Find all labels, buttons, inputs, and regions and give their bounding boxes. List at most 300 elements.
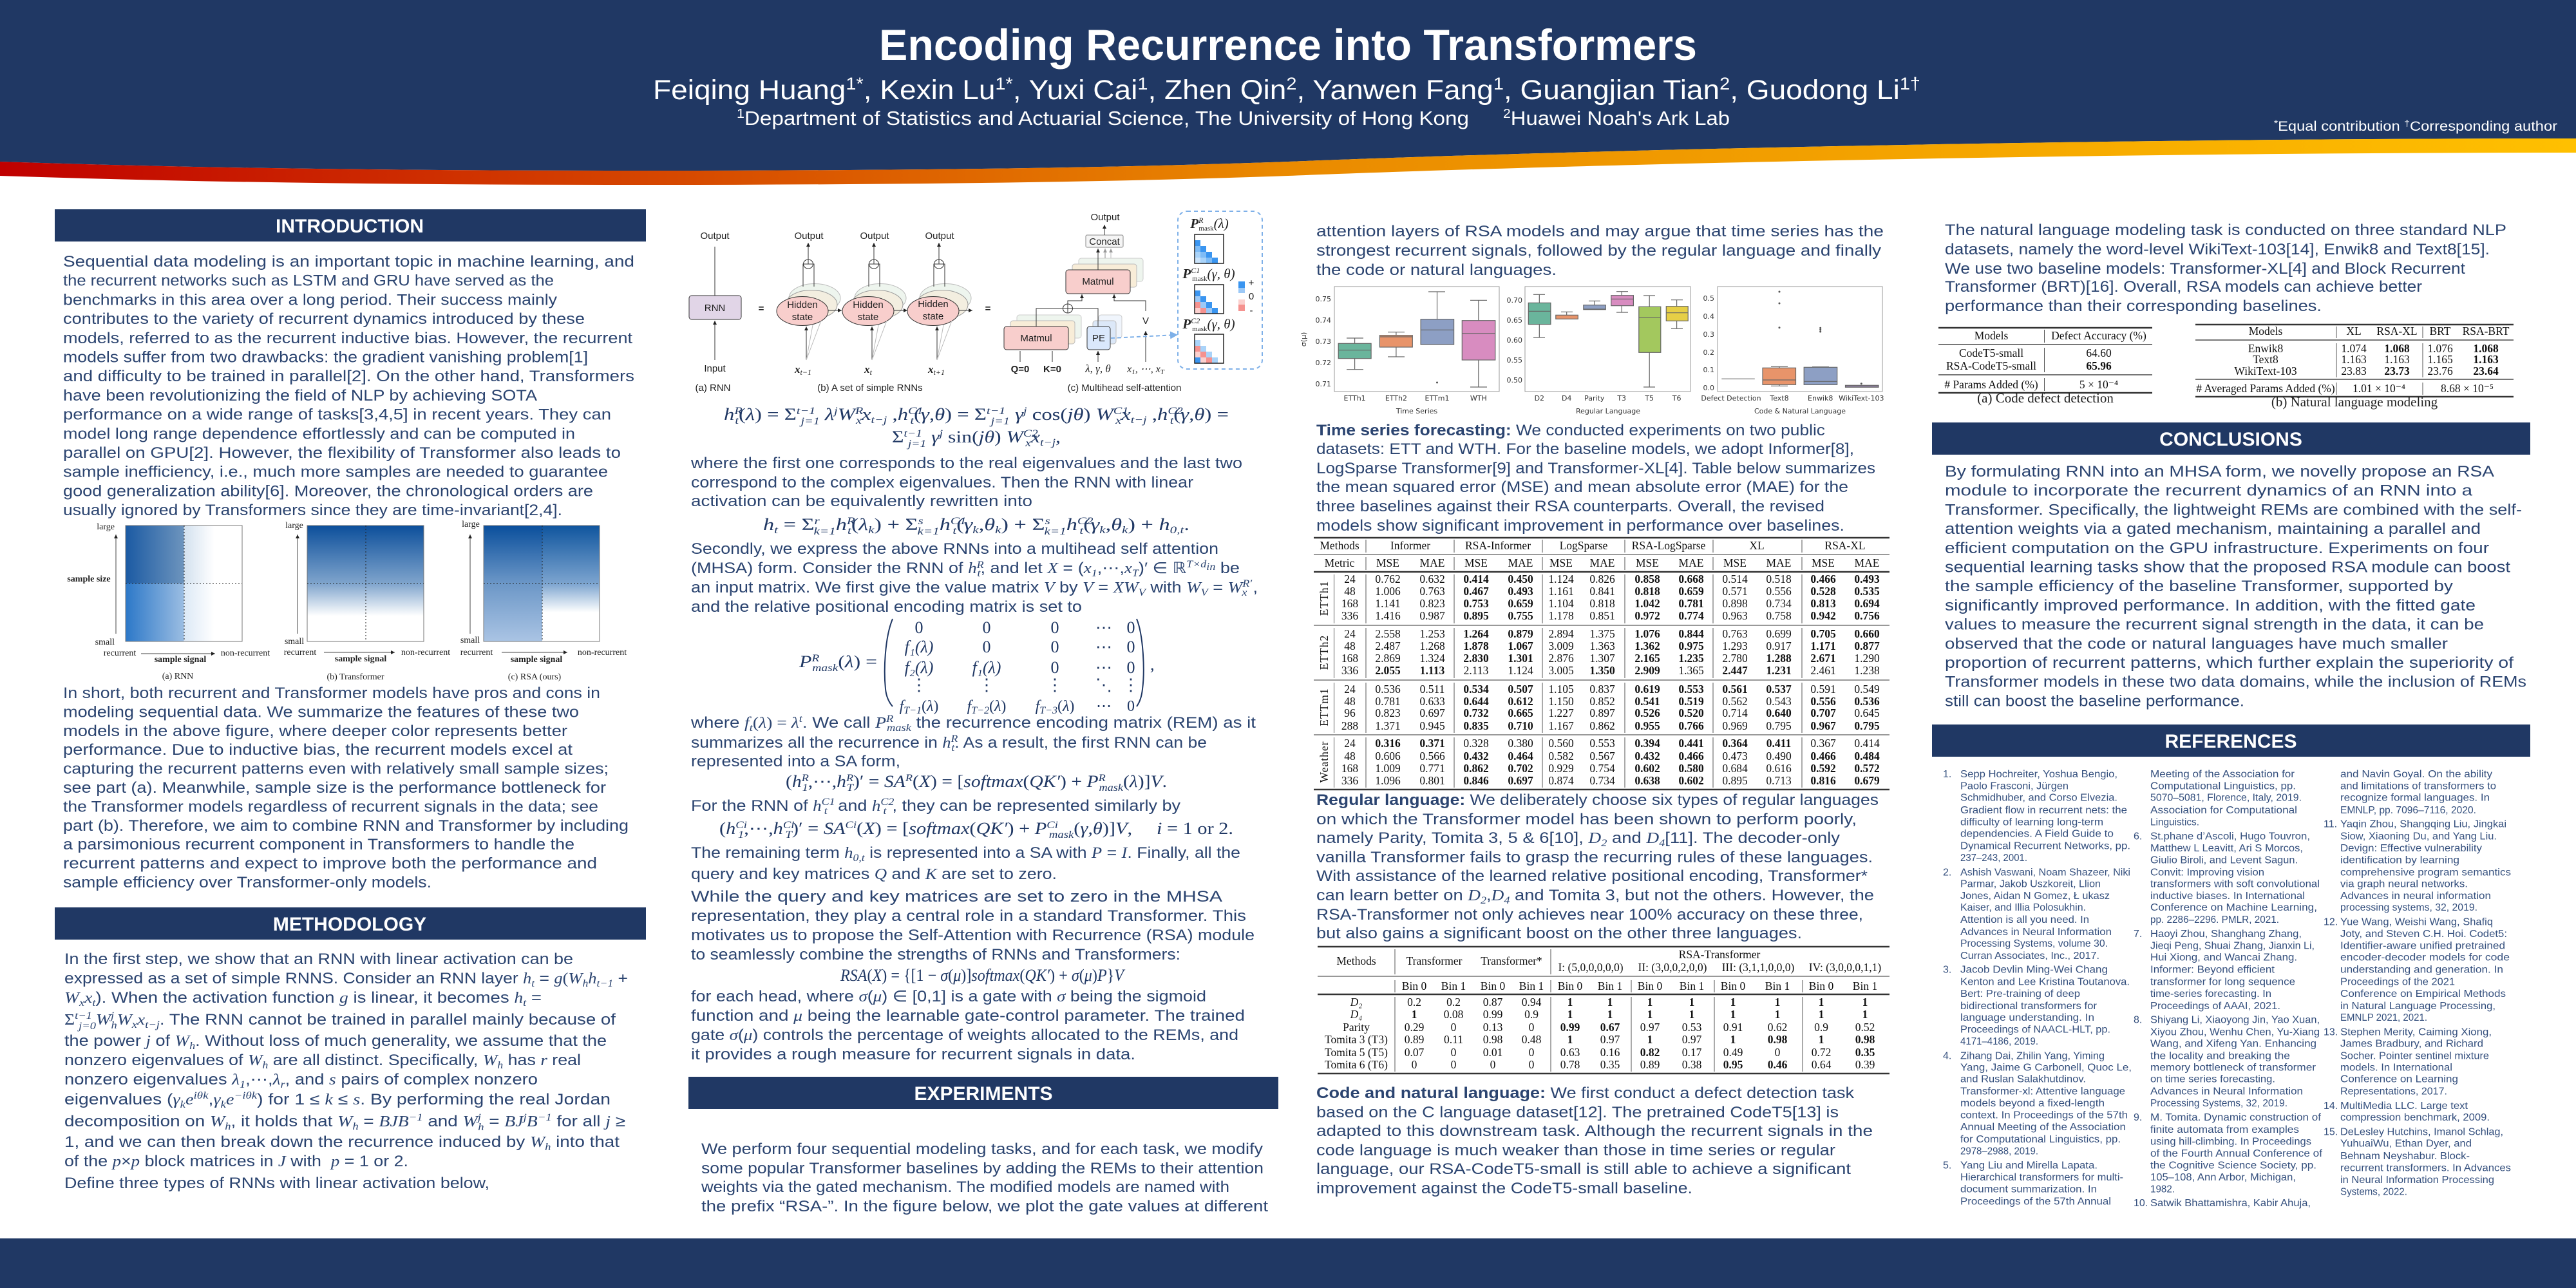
text: references column 2: pp. 2286–2296. PMLR, 2021.	[2150, 914, 2279, 925]
table: regular language results: 1	[1412, 1008, 1417, 1021]
text: remaining term and RSA description	[691, 844, 1255, 963]
table: regular language results: 0.9	[1814, 1021, 1828, 1034]
text: methodology paragraph: =	[535, 970, 554, 987]
table: regular language results: 0.98	[1483, 1033, 1503, 1046]
text: methodology paragraph: Σ	[64, 1012, 75, 1028]
equation: h_t decomposition: k	[995, 525, 1002, 536]
table: time series forecasting results: 0.835	[1463, 719, 1489, 732]
equation: P mask matrix: T−3	[1039, 705, 1057, 716]
equation: P mask matrix: (	[1057, 698, 1063, 715]
text: references column 3: encoder-decoder models for code	[2340, 952, 2510, 963]
chart: Transformer sample size vs signal heatmap: small	[285, 637, 304, 647]
equation: h_t decomposition: r	[815, 516, 820, 527]
table: regular language results: Bin 0	[1638, 980, 1662, 992]
chart: RNN sample size vs signal heatmap: small	[95, 638, 115, 647]
equation: three RNN types: ,	[887, 405, 898, 424]
text: methodology paragraph: , and	[285, 1071, 329, 1088]
text: regular language: namely Parity, Tomita 3, 5 & 6[10], D	[1316, 829, 1600, 847]
text: methodology paragraph: iθk	[194, 1090, 209, 1101]
text: references column 3: 15.	[2324, 1127, 2338, 1138]
text: references column 2: Shiyang Li, Xiaoyong Jin, Yao Xuan,	[2150, 1015, 2320, 1026]
text: references column 2: finite automata from examples	[2150, 1124, 2299, 1135]
authors: , Guodong Li	[1730, 75, 1900, 106]
diagram: (b) set of simple RNNs	[777, 231, 991, 393]
table: time series forecasting results: 0.756	[1854, 609, 1880, 622]
table: time series forecasting results: 0.969	[1722, 719, 1748, 732]
table: regular language results: 0.35	[1855, 1046, 1875, 1059]
table: regular language results: Bin 1	[1441, 980, 1466, 992]
text: references column 2: Advances in Neural Information	[2150, 1086, 2303, 1097]
diagram: (b) set of simple RNNs: Hidden	[918, 299, 949, 310]
chart: gate value boxplots, time series: 0.71	[1315, 380, 1331, 388]
table: time series forecasting results: 1.238	[1854, 664, 1880, 677]
text: regular language: and Tomita 3, but not the others. However, the	[1510, 887, 1874, 904]
equation: SA form of R: (	[913, 772, 919, 791]
text: references column 3: EMNLP 2021, 2021.	[2340, 1012, 2427, 1023]
text: time series forecasting: LogSparse Transformer[9] and Transformer-XL[4]. Table below summarizes	[1316, 460, 1875, 477]
table: time series forecasting results: MAE	[1590, 556, 1615, 569]
table: regular language results: 0.07	[1405, 1046, 1425, 1059]
text: references column 2: 9.	[2134, 1112, 2142, 1123]
text: MHSA form: in	[1206, 562, 1215, 573]
table: time series forecasting results: 0.895	[1722, 774, 1748, 787]
text: introduction paragraph	[63, 253, 634, 519]
text: regular language: ,	[1486, 887, 1492, 904]
chart: gate value boxplots, regular language: T3	[1616, 394, 1626, 402]
text: introduction paragraph: contributes to the variety of recurrent dynamics introduced by these	[63, 310, 585, 328]
table: time series forecasting results: 0.699	[1766, 627, 1792, 640]
table: time series forecasting results: 0.566	[1419, 750, 1445, 762]
chart: RNN sample size vs signal heatmap: non-recurrent	[221, 649, 270, 658]
text: methodology paragraph: x	[84, 990, 93, 1007]
chart: gate value boxplots, code and natural language: 0.0	[1703, 384, 1714, 392]
text: references column 2: Jieqi Peng, Shuai Zhang, Jianxin Li,	[2150, 941, 2315, 952]
table: time series forecasting results: 0.561	[1722, 683, 1748, 696]
equation: h_t decomposition: .	[1184, 515, 1189, 534]
table: natural language modeling: 1.076	[2427, 342, 2453, 355]
equation: three RNN types	[724, 405, 1229, 450]
table: time series forecasting results: 1.096	[1375, 774, 1401, 787]
table: time series forecasting results: 0.328	[1463, 737, 1489, 750]
text: references column 1: difficulty of learning long-term	[1960, 817, 2103, 828]
text: methodology paragraph: W	[483, 1052, 498, 1069]
chart: RNN sample size vs signal heatmap: large	[97, 522, 115, 532]
text: methodology paragraph: ,	[208, 1091, 213, 1108]
table: time series forecasting results: 0.560	[1548, 737, 1574, 750]
text: MHSA form: be	[1215, 560, 1240, 577]
table: code defect detection: Models	[1975, 329, 2008, 342]
chart: gate value boxplots, regular language: T6	[1672, 394, 1681, 402]
chart: RSA sample size vs signal heatmap: small	[460, 636, 480, 645]
text: recurrence encoding matrix explanation: R	[886, 714, 894, 724]
text: references column 1: bidirectional transformers for	[1960, 1001, 2098, 1012]
text: eigenvalue correspondence: where the first one corresponds to the real eigenvalues and the last two	[690, 455, 1242, 472]
table: time series forecasting results: 0.571	[1722, 585, 1748, 598]
text: methodology paragraph: x	[79, 998, 84, 1009]
diagram: recurrence encoding masks: -	[1249, 305, 1253, 316]
text: MHSA form: V	[1139, 587, 1147, 598]
diagram: (a) RNN: RNN	[705, 303, 725, 314]
table: regular language results: Bin 1	[1519, 980, 1544, 992]
equation: P mask matrix: f₂(λ)	[905, 658, 933, 677]
table: regular language results: 1	[1775, 1008, 1780, 1021]
table: time series forecasting results: 0.534	[1463, 683, 1489, 696]
text: experiments continued	[1316, 223, 1884, 279]
authors: , Kexin Lu	[864, 75, 995, 106]
text: MHSA form: and the relative positional encoding matrix is set to	[691, 598, 1082, 616]
diagram: recurrence encoding masks: (λ)	[1214, 216, 1229, 231]
table: time series forecasting results: MSE	[1812, 556, 1835, 569]
diagram: (b) set of simple RNNs: (b) A set of simple RNNs	[817, 383, 923, 393]
table: time series forecasting results: 2.461	[1810, 664, 1836, 677]
equation: h_t decomposition: (	[1083, 515, 1091, 534]
table: time series forecasting results: 0.762	[1375, 573, 1401, 585]
chart: gate value boxplots, code and natural language: Defect Detection	[1701, 394, 1761, 402]
text: MHSA form: ,	[1253, 579, 1258, 596]
table: time series forecasting results: MAE	[1679, 556, 1703, 569]
text: code and natural language: improvement against the CodeT5-small baseline.	[1316, 1180, 1692, 1197]
text: references column 1: Sepp Hochreiter, Yoshua Bengio,	[1960, 769, 2117, 780]
chart: gate value boxplots, time series: WTH	[1470, 394, 1487, 402]
equation: three RNN types: C1	[908, 406, 923, 417]
text: references column 3: processing systems, 32, 2019.	[2340, 902, 2477, 913]
text: references column 3: 12.	[2324, 916, 2338, 927]
table: time series forecasting results: 0.556	[1766, 585, 1792, 598]
text: methodology paragraph: j	[476, 1112, 482, 1123]
chart: gate value boxplots, regular language: 0.50	[1507, 376, 1522, 384]
text: time series forecasting: datasets: ETT and WTH. For the baseline models, we adopt Informer[8],	[1316, 440, 1854, 458]
table: time series forecasting results: 0.380	[1508, 737, 1533, 750]
text: time series forecasting: Time series forecasting: We conducted experiments on two public	[1316, 422, 1825, 439]
text: methodology paragraph: and	[423, 1113, 463, 1130]
text: references column 3: recurrent transformers. In Advances	[2340, 1162, 2511, 1173]
text: references column 3: and limitations of transformers to	[2340, 781, 2496, 792]
table: time series forecasting results: 0.837	[1589, 683, 1615, 696]
equation: SA form of R: mask	[1099, 782, 1124, 793]
text: references column 2: 105–108, Ann Arbor, Michigan,	[2150, 1172, 2296, 1183]
table: time series forecasting results: 0.543	[1766, 695, 1792, 708]
text: methodology paragraph: =	[484, 1113, 504, 1130]
text: references column 3	[2324, 769, 2511, 1198]
table: time series forecasting results: MAE	[1508, 556, 1533, 569]
table: time series forecasting results: 0.879	[1508, 627, 1533, 640]
text: MHSA form: , and let	[981, 560, 1047, 577]
heading: references	[1932, 724, 2530, 757]
table: time series forecasting results: MSE	[1376, 556, 1399, 569]
text: time series forecasting: three baselines against their RSA counterparts. Overall, the revised	[1316, 498, 1824, 515]
equation: SA form of R: ,⋯,	[808, 772, 837, 791]
chart: Transformer sample size vs signal heatmap: sample signal	[335, 654, 386, 664]
equation: h_t decomposition: k=1	[1045, 526, 1066, 537]
table: time series forecasting results: 0.975	[1678, 639, 1704, 652]
text: recurrence encoding matrix explanation: R	[950, 734, 958, 744]
text: experiments introduction: We perform four sequential modeling tasks, and for each task, we modify	[701, 1141, 1263, 1158]
text: methodology paragraph: h	[352, 1121, 359, 1132]
chart: gate value boxplots, regular language: 0.55	[1507, 356, 1522, 365]
text: references column 1: 2978–2988, 2019.	[1960, 1146, 2038, 1157]
text: references column 2: the Cognitive Science Society, pp.	[2150, 1160, 2316, 1171]
text: references column 1: Jones, Aidan N Gomez, Ł ukasz	[1960, 891, 2110, 902]
table: regular language results: 0.49	[1723, 1046, 1743, 1059]
table: time series forecasting results: 0.612	[1508, 695, 1533, 708]
table: natural language modeling: RSA-BRT	[2463, 325, 2510, 337]
equation: three RNN types: t−1	[797, 406, 815, 417]
equation: three RNN types: t−j	[1040, 437, 1056, 448]
table: code defect detection: # Params Added (%)	[1944, 378, 2038, 391]
equation: P mask matrix: mask	[812, 663, 838, 674]
text: references column 3: 11.	[2324, 819, 2337, 830]
table: time series forecasting results: 0.801	[1419, 774, 1445, 787]
equation: SA form of R: T	[847, 782, 854, 793]
table: regular language results: Methods	[1336, 954, 1376, 967]
chart: gate value boxplots, time series: ETTm1	[1425, 394, 1449, 402]
text: MHSA form: 1	[1092, 568, 1097, 579]
text: eigenvalue correspondence	[690, 455, 1242, 510]
table: natural language modeling: 23.64	[2473, 365, 2499, 377]
equation: three RNN types: x	[861, 405, 871, 424]
diagram: (c) multihead self-attention: T	[1160, 368, 1165, 376]
table: time series forecasting results: XL	[1749, 539, 1765, 552]
equation: three RNN types: sin(	[943, 428, 979, 446]
table: time series forecasting results: 0.710	[1508, 719, 1533, 732]
text: references column 1: Gradient flow in recurrent nets: the	[1960, 805, 2127, 816]
diagram: (b) set of simple RNNs: Output	[794, 231, 824, 242]
table: code defect detection: (a) Code defect detection	[1977, 390, 2114, 406]
table: time series forecasting results: 1.124	[1508, 664, 1533, 677]
equation: h_t decomposition: ) +	[1128, 515, 1159, 534]
text: recurrence encoding matrix explanation: . As a result, the first RNN can be	[954, 734, 1207, 752]
text: conclusions paragraph: sequential learning tasks show that the proposed RSA module can boost	[1945, 559, 2510, 576]
table: regular language results: Tomita 5 (T5)	[1325, 1046, 1388, 1059]
text: remaining term and RSA description: While the query and key matrices are set to zero in the MHSA	[691, 888, 1222, 905]
text: recurrence encoding matrix explanation: the recurrence encoding matrix (REM) as it	[911, 714, 1256, 732]
text: references column 3: Conference on Empirical Methods	[2340, 989, 2506, 999]
text: references column 2: using hill-climbing. In Proceedings	[2150, 1137, 2311, 1148]
equation: SA form of C: (h	[719, 819, 734, 838]
equation: three RNN types: h	[898, 405, 906, 424]
table: regular language results: 0	[1451, 1021, 1457, 1034]
equation: h_t decomposition: (	[851, 515, 858, 534]
table: regular language results: 1	[1862, 996, 1868, 1009]
text: methodology paragraph: W	[463, 1113, 479, 1130]
table: time series forecasting results: 0.963	[1722, 609, 1748, 622]
equation: three RNN types: (	[914, 405, 921, 424]
chart: gate value boxplots, code and natural language: 0.4	[1703, 312, 1714, 321]
equation: P mask matrix: 0	[1127, 638, 1135, 656]
table: time series forecasting results: 1.288	[1766, 652, 1792, 665]
equation: RSA: RSA(X) = {[1 − σ(μ)]softmax(QK′) + σ(μ)P}V	[840, 966, 1126, 985]
equation: three RNN types: γ	[926, 428, 940, 446]
text: methodology paragraph: ). When the activation function	[96, 989, 339, 1007]
table: natural language modeling: 1.165	[2427, 353, 2453, 366]
text: references column 1: Kaiser, and Illia Polosukhin.	[1960, 902, 2086, 913]
table: regular language results: 0.9	[1524, 1008, 1539, 1021]
table: regular language results: Transformer*	[1481, 954, 1542, 967]
text: experiments continued: the code or natural languages.	[1316, 261, 1557, 279]
text: references column 2: Giulio Biroli, and Levent Sagun.	[2150, 855, 2298, 866]
equation: three RNN types: jθ) W	[1067, 405, 1110, 424]
diagram: (c) multihead self-attention: K=0	[1043, 364, 1061, 375]
text: experiments continued: attention layers of RSA models and may argue that time series has the	[1316, 223, 1884, 240]
equation: SA form of C: h	[773, 819, 782, 838]
text: references column 1: dependencies. A Field Guide to	[1960, 829, 2114, 840]
table: time series forecasting results: 0.755	[1508, 609, 1533, 622]
equation: h_t decomposition: t	[848, 526, 852, 536]
table: natural language modeling: RSA-XL	[2376, 325, 2418, 337]
text: summary of pros and cons: see part (a). Meanwhile, sample size is the performance bottleneck for	[63, 779, 606, 797]
text: references column 2: Xiyou Zhou, Wenhu Chen, Yu-Xiang	[2150, 1027, 2320, 1038]
text: methodology paragraph: t−j	[145, 1019, 160, 1030]
table: regular language results: RSA-Transformer	[1679, 948, 1761, 961]
text: references column 1: Annual Meeting of the Association	[1960, 1122, 2126, 1133]
table: regular language results: 0.39	[1855, 1058, 1875, 1071]
chart: Transformer sample size vs signal heatmap: recurrent	[284, 648, 316, 658]
text: MHSA form: )′ ∈ ℝ	[1139, 560, 1186, 577]
table: regular language results: 0.67	[1600, 1021, 1620, 1034]
table: time series forecasting results: 0.553	[1589, 737, 1615, 750]
table: time series forecasting results: 0.493	[1508, 585, 1533, 598]
chart: gate value boxplots, regular language: T5	[1644, 394, 1654, 402]
table: time series forecasting results: 0.371	[1419, 737, 1445, 750]
table: time series forecasting results: 0.826	[1589, 573, 1615, 585]
equation: P mask matrix: ,	[1150, 655, 1154, 674]
table: time series forecasting results: 24	[1344, 573, 1356, 585]
table: regular language results: II: (3,0,0,2,0,0)	[1638, 961, 1707, 974]
diagram: (c) multihead self-attention: Q=0	[1011, 364, 1029, 375]
heading: introduction	[55, 209, 646, 242]
chart: gate value boxplots, time series: ETTh1	[1344, 394, 1366, 402]
text: references column 3: in Neural Information Processing	[2340, 1175, 2494, 1186]
table: time series forecasting results: 168	[1341, 762, 1358, 775]
text: references column 3: understanding and generation. In	[2340, 965, 2503, 976]
text: references column 1: 4.	[1943, 1050, 1951, 1061]
table: time series forecasting results: 0.644	[1463, 695, 1489, 708]
table: time series forecasting results: 0.556	[1810, 695, 1836, 708]
diagram: (b) set of simple RNNs: Output	[860, 231, 889, 242]
table: regular language results: 0.46	[1768, 1058, 1788, 1071]
text: conclusions paragraph: efficient computation on the GPU infrastructure. Experiments on four	[1945, 540, 2489, 557]
table: time series forecasting results: 1.076	[1634, 627, 1660, 640]
equation: P mask matrix: (	[838, 652, 845, 671]
text: references column 3: EMNLP, pp. 7096–7116, 2020.	[2340, 805, 2476, 816]
equation: h_t decomposition: h	[1159, 515, 1168, 534]
authors: Feiqing Huang	[653, 75, 833, 106]
table: natural language modeling: Models	[2249, 325, 2282, 337]
table: regular language results: Bin 1	[1853, 980, 1877, 992]
table: time series forecasting results: MSE	[1636, 556, 1659, 569]
equation: SA form of C: mask	[1049, 829, 1074, 840]
table: regular language results: 0	[1529, 1058, 1535, 1071]
text: references column 3: Stephen Merity, Caiming Xiong,	[2340, 1027, 2492, 1038]
equation: three RNN types: Σ	[892, 428, 904, 446]
table: code defect detection: Defect Accuracy (%)	[2051, 329, 2146, 342]
table: time series forecasting results	[1314, 538, 1889, 790]
text: references column 1: Kenton and Lee Kristina Toutanova.	[1960, 976, 2130, 988]
table: time series forecasting results: 0.467	[1463, 585, 1489, 598]
equation: P mask matrix: 0	[1127, 698, 1135, 715]
table: code defect detection: CodeT5-small	[1959, 346, 2023, 359]
diagram: (a) RNN: (a) RNN	[696, 383, 730, 393]
table: regular language results: Bin 0	[1809, 980, 1833, 992]
table: regular language results: 0	[1529, 1021, 1535, 1034]
table: regular language results: Tomita 6 (T6)	[1325, 1058, 1388, 1071]
table: time series forecasting results: MSE	[1723, 556, 1747, 569]
text: references column 2: inductive biases. In International	[2150, 891, 2305, 902]
text: references column 3: identification by learning	[2340, 855, 2459, 866]
table: time series forecasting results: 0.567	[1589, 750, 1615, 762]
table: time series forecasting results: 0.638	[1634, 774, 1660, 787]
text: references column 3: Identifier-aware unified pretrained	[2340, 941, 2505, 952]
table: time series forecasting results: 336	[1341, 664, 1358, 677]
text: recurrence encoding matrix explanation: t	[750, 723, 753, 734]
equation: P mask matrix: (	[989, 698, 994, 715]
text: summary of pros and cons	[63, 685, 629, 891]
table: regular language results: 1	[1730, 1008, 1736, 1021]
equation: SA form of R: (	[1123, 772, 1130, 791]
table: time series forecasting results: 0.967	[1810, 719, 1836, 732]
table: regular language results: 0.08	[1444, 1008, 1464, 1021]
equation: SA form of C: X) = [ softmax (QK′ ) + P	[863, 819, 1045, 838]
header banner	[0, 0, 2576, 185]
table: regular language results: D₂	[1350, 996, 1362, 1009]
table: time series forecasting results: 0.432	[1463, 750, 1489, 762]
equation: h_t decomposition: t	[1079, 526, 1084, 536]
table: time series forecasting results: 0.316	[1375, 737, 1401, 750]
table: time series forecasting results: 0.511	[1420, 683, 1444, 696]
table: time series forecasting results: 0.536	[1854, 695, 1880, 708]
table: time series forecasting results: Informer	[1390, 539, 1430, 552]
equation: three RNN types: γ,θ ) = Σ	[921, 405, 978, 424]
diagram: (b) set of simple RNNs: t+1	[934, 368, 945, 377]
text: introduction paragraph: have been revolutionizing the field of NLP by achieving SOTA	[63, 387, 537, 404]
text: methodology paragraph: +	[613, 970, 628, 987]
equation: P mask matrix: 0	[914, 618, 923, 637]
table: time series forecasting results: 1.231	[1766, 664, 1792, 677]
text: methodology paragraph: nonzero eigenvalues of W	[64, 1052, 261, 1069]
diagram: (c) multihead self-attention: Matmul	[1020, 333, 1052, 344]
table: time series forecasting results: MAE	[1855, 556, 1879, 569]
table: time series forecasting results: 2.558	[1375, 627, 1401, 640]
table: natural language modeling: WikiText-103	[2234, 365, 2297, 377]
equation: three RNN types: j=1	[906, 439, 926, 450]
text: summary of pros and cons: the Transformer models regardless of recurrent signals in the data; see	[63, 798, 598, 815]
equation: h_t decomposition: λ	[858, 515, 866, 534]
table: regular language results: 0.97	[1682, 1033, 1702, 1046]
text: references column 1: and Ruslan Salakhutdinov.	[1960, 1074, 2086, 1085]
text: methodology paragraph: into that	[551, 1133, 620, 1151]
heading: conclusions: CONCLUSIONS	[2159, 429, 2302, 450]
chart: gate value boxplots, regular language: 0.60	[1507, 336, 1522, 345]
text: methodology paragraph	[64, 951, 628, 1192]
equation: SA form of C: γ,θ)]V, i = 1 or 2.	[1080, 819, 1223, 838]
title: Encoding Recurrence into Transformers	[879, 21, 1697, 70]
authors: 1†	[1900, 74, 1920, 93]
chart: gate value boxplots, code and natural language: Enwik8	[1808, 394, 1833, 402]
text: introduction paragraph: benchmarks in this area over a long period. Their success mainly	[63, 291, 557, 308]
table: regular language results: 0.01	[1483, 1046, 1502, 1059]
text: methodology paragraph: Define three types of RNNs with linear activation below,	[64, 1175, 489, 1192]
equation: three RNN types: j=1	[799, 416, 820, 427]
equation: P mask matrix: 0	[1051, 658, 1059, 677]
text: code and natural language: adapted to this downstream task. Although the recurrent signals in the	[1316, 1122, 1873, 1140]
table: time series forecasting results: RSA-LogSparse	[1632, 539, 1706, 552]
text: references column 3: Conference on Learning	[2340, 1074, 2458, 1085]
equation: P mask matrix: ⋯	[1095, 658, 1112, 677]
equation: three RNN types: γ	[1010, 405, 1024, 424]
table: regular language results: 0.99	[1483, 1008, 1503, 1021]
text: complex RNN form: h	[872, 798, 880, 815]
text: methodology paragraph: W	[96, 1012, 112, 1028]
